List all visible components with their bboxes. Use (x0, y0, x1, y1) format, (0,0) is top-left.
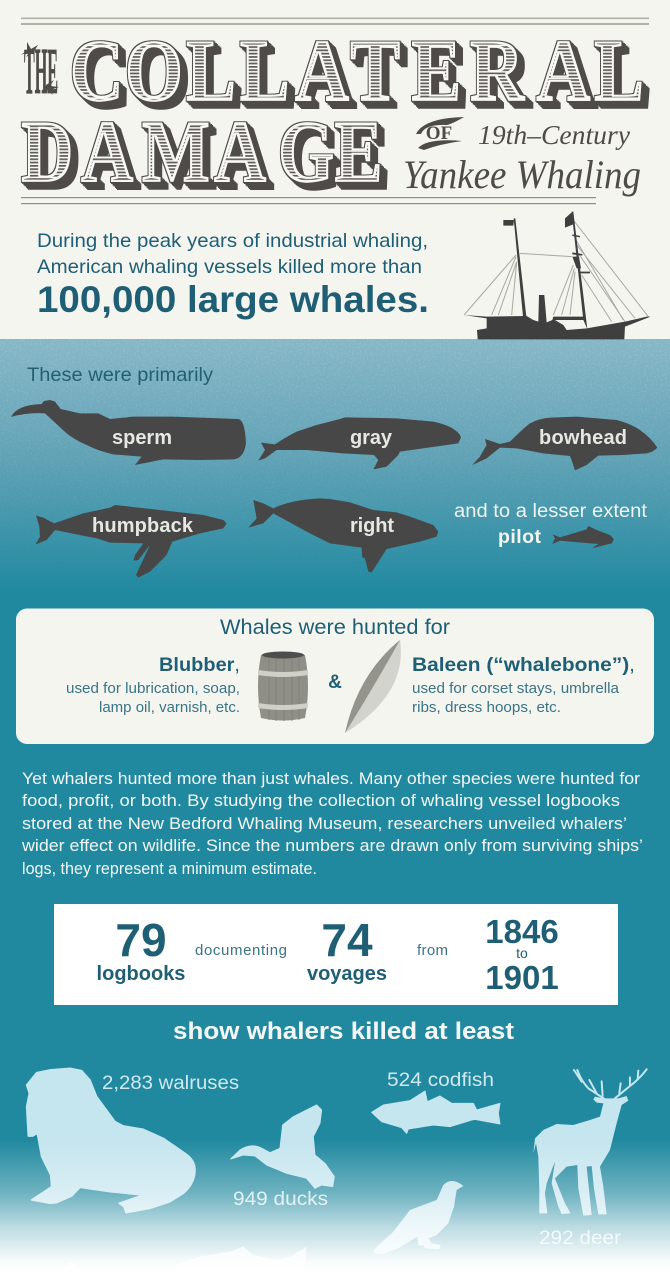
labels: animals (102, 1070, 622, 1249)
text: ampersand: & (328, 672, 342, 693)
whale: right (248, 498, 438, 572)
text: baleen: ribs, dress hoops, etc. (412, 700, 561, 716)
text: yet whalers paragraph (21, 770, 643, 878)
intro text: American whaling vessels killed more than (37, 256, 422, 278)
panel: whales were hunted for (16, 608, 654, 744)
stat: 74 voyages: 74 (321, 914, 373, 966)
panel: logbooks stats (54, 904, 618, 1005)
whale: pilot (498, 526, 614, 548)
labels: animals: 292 deer (539, 1228, 622, 1249)
stat: 79 logbooks: logbooks (97, 963, 185, 985)
whales (11, 400, 657, 578)
whale: humpback (36, 505, 227, 578)
heading: whales were hunted for: Whales were hunted for (220, 616, 450, 639)
text: yet whalers paragraph: stored at the New Bedford Whaling Museum, researchers unveiled whalers’ (22, 815, 627, 833)
stat: 1846 to 1901: 1846 (485, 913, 559, 950)
background: paper (0, 0, 670, 340)
bottom fade overlay (0, 1140, 670, 1278)
animal: codfish (372, 1091, 500, 1133)
title: THE (24, 35, 58, 108)
whale: bowhead (472, 417, 657, 470)
stat: 1846 to 1901 (485, 913, 559, 996)
title: 19th-century: 19th–Century (478, 120, 630, 150)
animal: deer (533, 1069, 647, 1216)
text: documenting: documenting (195, 942, 287, 959)
text: from: from (417, 942, 448, 959)
header rules bottom (21, 197, 596, 204)
text: yet whalers paragraph: Yet whalers hunted more than just whales. Many other species were hunted for (22, 770, 641, 788)
animal: walrus (27, 1068, 195, 1213)
animal: grouse (373, 1181, 463, 1254)
labels: animals: 524 codfish (387, 1070, 494, 1091)
whale: bowhead: bowhead (539, 427, 627, 449)
text: baleen: Baleen (“whalebone”) , (412, 654, 635, 676)
stat: 79 logbooks: 79 (115, 914, 167, 966)
labels: animals: 949 ducks (233, 1189, 328, 1210)
whale: pilot: pilot (498, 526, 542, 548)
text: yet whalers paragraph: logs, they represent a minimum estimate. (22, 860, 317, 878)
text: blubber: lamp oil, varnish, etc. (99, 700, 240, 716)
whale: gray: gray (350, 427, 393, 449)
intro text (37, 230, 429, 320)
stat: 74 voyages (307, 914, 387, 985)
whale: sperm: sperm (112, 427, 172, 449)
text: blubber: used for lubrication, soap, (66, 681, 240, 697)
animal: seal (fading) (60, 1262, 83, 1275)
icon: barrel (258, 652, 308, 721)
icon: whaling ship (464, 212, 651, 339)
intro text: 100,000 large whales. (37, 279, 429, 320)
title: of banner (416, 117, 464, 150)
title (21, 21, 644, 201)
stat: 74 voyages: voyages (307, 963, 387, 985)
text: and to a lesser extent: and to a lesser extent (454, 501, 648, 522)
title: the (21, 35, 59, 108)
whale: humpback: humpback (92, 515, 194, 537)
text: yet whalers paragraph: wider effect on wildlife. Since the numbers are drawn only from surviving ships’ (21, 837, 643, 855)
icon: baleen (345, 640, 401, 733)
animal: salmon (fading) (175, 1247, 307, 1275)
whale: gray (258, 417, 461, 469)
title: collateral: COLLATERAL (70, 21, 644, 119)
text: baleen: used for corset stays, umbrella (412, 681, 620, 697)
stat: 79 logbooks (97, 914, 185, 985)
text: yet whalers paragraph: food, profit, or both. By studying the collection of whaling vessel logbooks (22, 792, 620, 810)
animal: duck (231, 1105, 334, 1188)
heading: show whalers killed: show whalers killed at least (173, 1018, 514, 1045)
text: blubber (66, 654, 240, 716)
title: damage: DAMAGE (21, 103, 383, 201)
title: of banner: OF (426, 123, 452, 144)
labels: animals: 2,283 walruses (102, 1073, 239, 1094)
text: these were primarily: These were primarily (27, 364, 213, 386)
whale: sperm (11, 400, 246, 465)
stat: 1846 to 1901: 1901 (485, 959, 559, 996)
text: blubber: Blubber, (159, 654, 240, 676)
text: baleen (412, 654, 635, 716)
background: sea (0, 339, 670, 1278)
whale: right: right (350, 515, 394, 537)
title: yankee whaling: Yankee Whaling (403, 152, 641, 197)
intro text: During the peak years of industrial whaling, (37, 230, 428, 252)
header rules top (21, 18, 649, 25)
stat: 1846 to 1901: to (516, 945, 528, 961)
animals (27, 1068, 647, 1275)
